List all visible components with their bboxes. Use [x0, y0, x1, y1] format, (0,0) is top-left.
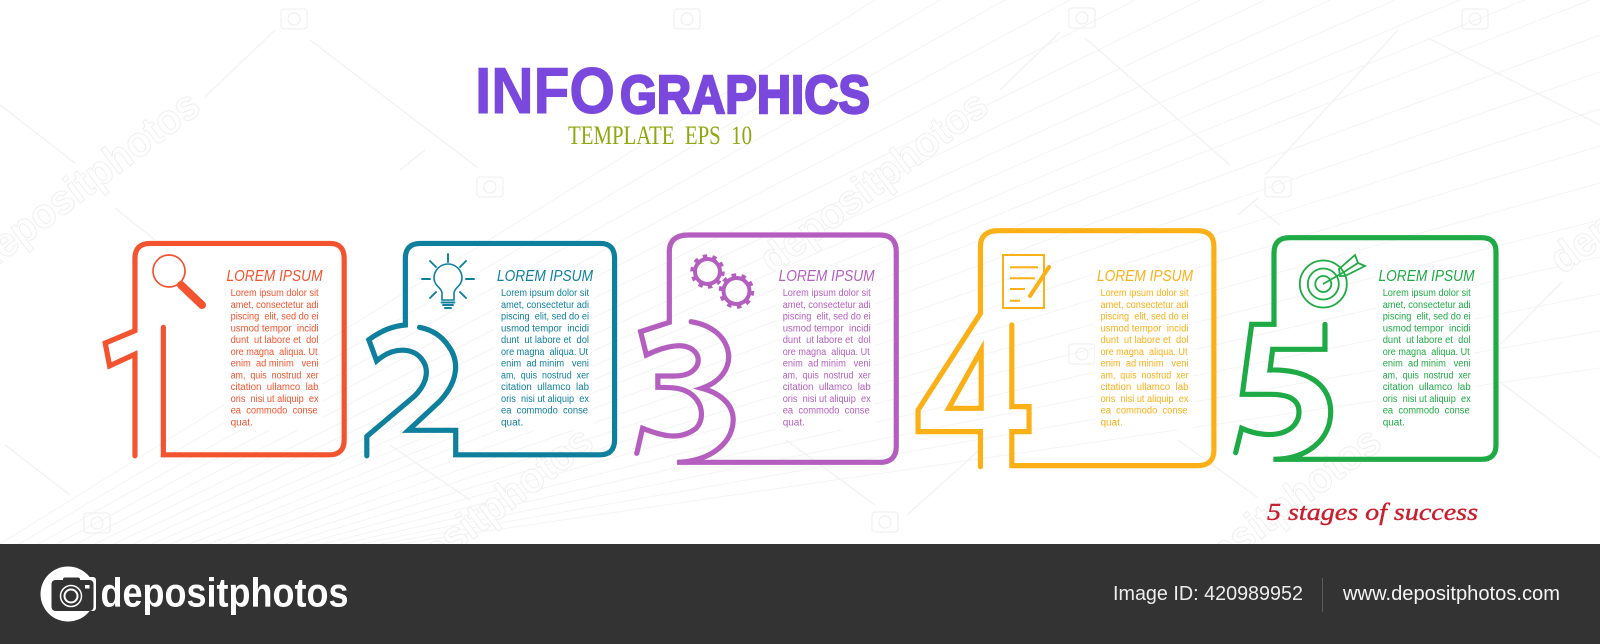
icon: document and pen [1003, 255, 1049, 308]
step 1 text: am, quis nostrud xer [231, 370, 319, 381]
text: depositphotos [1143, 416, 1389, 618]
title: GRAPHICS [620, 65, 870, 125]
step 3 text: citation ullamco lab [783, 382, 871, 393]
panel: step 2 [367, 243, 615, 456]
step 5 text: amet, consectetur adi [1383, 300, 1471, 311]
step 2 text: Lorem ipsum dolor sit [501, 288, 589, 299]
step 4 text [1095, 266, 1193, 430]
step 1 text: usmod tempor incidi [231, 323, 319, 334]
step 1 text: citation ullamco lab [231, 382, 319, 393]
step 2 text: usmod tempor incidi [501, 323, 589, 334]
icon: target with arrow [1300, 255, 1365, 308]
panel: step 3 [637, 235, 896, 462]
step 1 text: dunt ut labore et dol [231, 335, 319, 346]
text: depositphotos [750, 80, 996, 282]
numeral 2 and frame [367, 243, 615, 456]
step 5 text [1376, 266, 1475, 430]
panel: step 1 [105, 243, 344, 456]
step 5 text: dunt ut labore et dol [1383, 335, 1471, 346]
step 4 text: ea commodo conse [1100, 406, 1188, 417]
step 3 text: enim ad minim veni [783, 359, 871, 370]
icon: depositphotos camera logo [40, 566, 96, 622]
step 5 text: Lorem ipsum dolor sit [1383, 288, 1471, 299]
step 1 text: ore magna aliqua. Ut [231, 347, 318, 358]
step 2 text: oris nisi ut aliquip ex [501, 394, 589, 405]
step 3 text: am, quis nostrud xer [783, 370, 871, 381]
tagline: 5 stages of success [1267, 500, 1478, 526]
step 3 text: oris nisi ut aliquip ex [783, 394, 871, 405]
step 3 text [776, 266, 875, 430]
step 2 text [495, 266, 593, 430]
step 5 text: quat. [1383, 418, 1405, 428]
numeral 3 and frame [637, 235, 896, 462]
step 4 text: am, quis nostrud xer [1100, 370, 1189, 381]
step 3 text: dunt ut labore et dol [783, 335, 871, 346]
step 5 text: LOREM IPSUM [1378, 268, 1475, 285]
step 3 text: Lorem ipsum dolor sit [783, 288, 871, 299]
step 4 text: LOREM IPSUM [1097, 268, 1193, 285]
step 4 text: enim ad minim veni [1100, 359, 1188, 370]
step 4 text: oris nisi ut aliquip ex [1100, 394, 1188, 405]
step 5 text: am, quis nostrud xer [1383, 370, 1471, 381]
panel: step 4 [918, 231, 1214, 467]
step 4 text: ore magna aliqua. Ut [1100, 347, 1188, 358]
step 4 text: Lorem ipsum dolor sit [1100, 288, 1189, 299]
step 2 text: amet, consectetur adi [501, 300, 589, 311]
step 5 text: ea commodo conse [1383, 406, 1470, 417]
step 3 text: amet, consectetur adi [783, 300, 871, 311]
step 5 text: oris nisi ut aliquip ex [1383, 394, 1471, 405]
step 2 text: piscing elit, sed do ei [501, 312, 589, 322]
image id: Image ID: 420989952 [1113, 583, 1303, 605]
step 4 text: piscing elit, sed do ei [1100, 312, 1188, 322]
step 3 text: usmod tempor incidi [783, 323, 871, 334]
step 1 text: oris nisi ut aliquip ex [231, 394, 319, 405]
logo wordmark: depositphotos [100, 570, 348, 616]
title: INFO [475, 54, 615, 127]
step 2 text: ea commodo conse [501, 406, 588, 417]
numeral 4 and frame [918, 231, 1214, 467]
numeral 5 and frame [1236, 238, 1496, 459]
step 2 text: LOREM IPSUM [497, 268, 593, 285]
text: depositphotos [355, 416, 601, 618]
step 2 text: dunt ut labore et dol [501, 335, 589, 346]
step 5 text: citation ullamco lab [1383, 382, 1471, 393]
website url: www.depositphotos.com [1342, 583, 1560, 605]
step 4 text: amet, consectetur adi [1100, 300, 1188, 311]
step 4 text: quat. [1100, 418, 1123, 428]
footer bar [0, 544, 1600, 644]
step 4 text: citation ullamco lab [1100, 382, 1189, 393]
step 1 text: enim ad minim veni [231, 359, 319, 370]
step 2 text: citation ullamco lab [501, 382, 589, 393]
step 3 text: ore magna aliqua. Ut [783, 347, 870, 358]
step 2 text: ore magna aliqua. Ut [501, 347, 588, 358]
step 1 text [224, 266, 323, 430]
step 3 text: piscing elit, sed do ei [783, 312, 871, 322]
step 2 text: quat. [501, 418, 523, 428]
icon: gears [692, 256, 752, 307]
step 1 text: amet, consectetur adi [231, 300, 319, 311]
panel: step 5 [1236, 238, 1496, 459]
icon: magnifier [153, 255, 202, 305]
step 5 text: ore magna aliqua. Ut [1383, 347, 1470, 358]
step 1 text: quat. [231, 418, 253, 428]
step 5 text: piscing elit, sed do ei [1383, 312, 1471, 322]
step 3 text: ea commodo conse [783, 406, 870, 417]
step 2 text: am, quis nostrud xer [501, 370, 590, 381]
step 2 text: enim ad minim veni [501, 359, 589, 370]
icon: light bulb [422, 254, 474, 308]
numeral 1 and frame [105, 243, 344, 456]
step 4 text: usmod tempor incidi [1100, 323, 1188, 334]
subtitle: TEMPLATE EPS 10 [568, 121, 752, 150]
step 4 text: dunt ut labore et dol [1100, 335, 1188, 346]
title [475, 54, 870, 127]
step 1 text: Lorem ipsum dolor sit [231, 288, 319, 299]
step 1 text: ea commodo conse [231, 406, 318, 417]
step 1 text: piscing elit, sed do ei [231, 312, 319, 322]
step 5 text: usmod tempor incidi [1383, 323, 1471, 334]
step 5 text: enim ad minim veni [1383, 359, 1471, 370]
step 3 text: quat. [783, 418, 805, 428]
step 1 text: LOREM IPSUM [226, 268, 323, 285]
step 3 text: LOREM IPSUM [779, 268, 875, 285]
